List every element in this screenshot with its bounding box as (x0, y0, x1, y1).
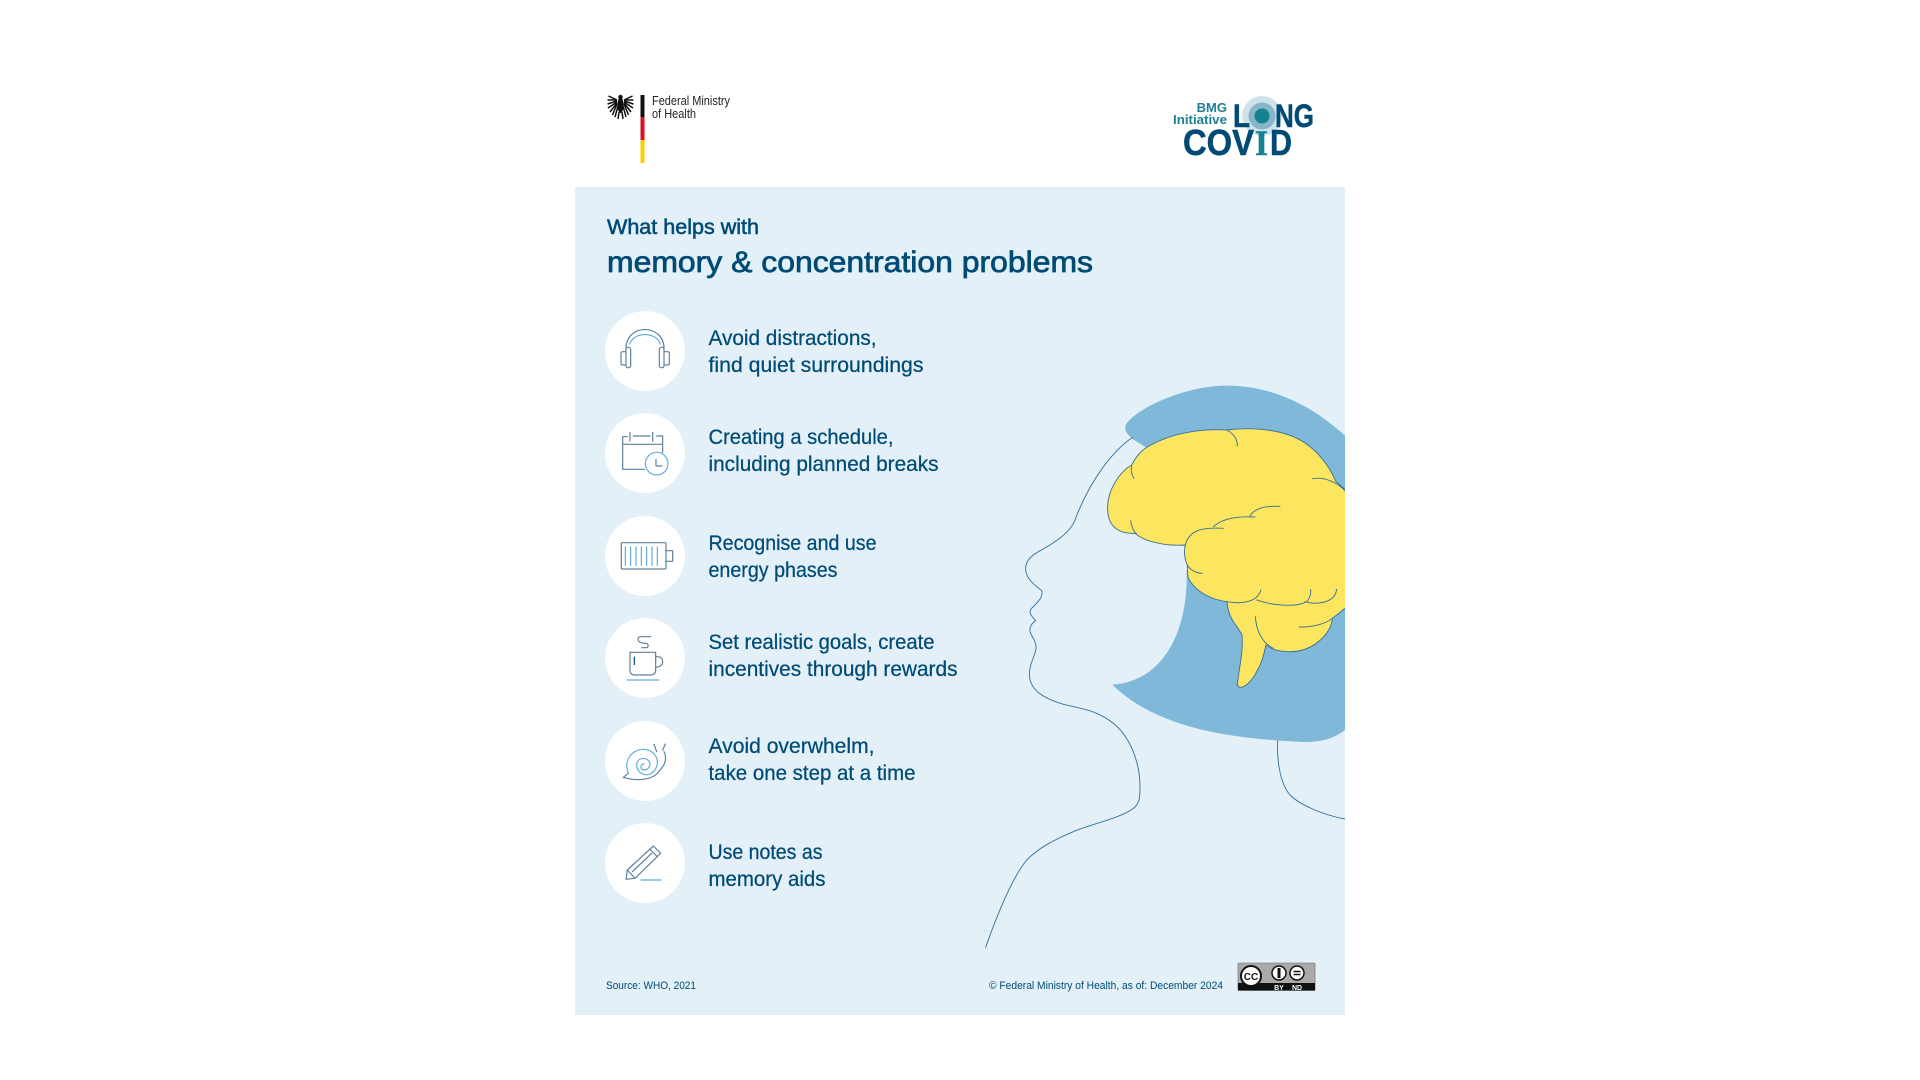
title (607, 216, 1093, 279)
item: notes (605, 823, 826, 903)
text: Set realistic goals, create (708, 631, 934, 654)
brain (1108, 429, 1350, 687)
ministry name: Federal Ministry (652, 93, 730, 108)
Long Covid initiative logo (1173, 96, 1314, 163)
copyright note: © Federal Ministry of Health, as of: December 2024 (989, 980, 1223, 992)
ministry name: of Health (652, 106, 696, 121)
ministry logo (608, 93, 730, 163)
item: schedule (605, 413, 938, 493)
text: Creating a schedule, (708, 426, 894, 449)
icon: headphones (605, 311, 685, 391)
icon: creative commons badge (1238, 963, 1315, 992)
text: Recognise and use (708, 532, 876, 555)
text (708, 631, 958, 681)
item: avoid overwhelm (605, 721, 916, 801)
brain folds (1131, 430, 1345, 648)
source note: Source: WHO, 2021 (606, 980, 696, 992)
back of neck outline (1277, 741, 1345, 819)
initiative label (1173, 100, 1227, 127)
logo target halo (1242, 96, 1282, 136)
title: What helps with (607, 216, 759, 239)
hair back (1112, 570, 1345, 742)
icon: creative commons badge: CC (1244, 972, 1258, 983)
text: incentives through rewards (708, 658, 958, 681)
title: memory & concentration problems (607, 246, 1093, 279)
initiative label: BMG (1197, 100, 1227, 115)
illustration: head with brain (986, 386, 1350, 947)
icon: creative commons badge: BY (1274, 985, 1284, 992)
text (708, 735, 916, 785)
text (708, 841, 826, 891)
COVID wordmark: D (1270, 122, 1292, 163)
COVID wordmark: COV (1183, 122, 1254, 163)
text (708, 532, 876, 582)
item: avoid distractions (605, 311, 924, 391)
text: take one step at a time (708, 762, 916, 785)
item: energy phases (605, 516, 876, 596)
text: energy phases (708, 559, 838, 582)
text: Avoid overwhelm, (708, 735, 874, 758)
hair top (1125, 386, 1345, 489)
text (708, 426, 938, 476)
panel: background (575, 187, 1345, 1015)
icon: german flag bar (640, 95, 644, 163)
icon: coffee cup (605, 618, 685, 698)
ministry name (652, 93, 730, 121)
icon: snail (605, 721, 685, 801)
LONG wordmark: L (1233, 98, 1250, 134)
text (708, 327, 924, 377)
icon: calendar with clock (605, 413, 685, 493)
text: find quiet surroundings (708, 354, 924, 377)
LONG wordmark: NG (1275, 98, 1314, 134)
text: Avoid distractions, (708, 327, 876, 350)
face and neck outline (986, 437, 1140, 947)
initiative label: Initiative (1173, 112, 1227, 127)
LONG wordmark (1233, 98, 1314, 134)
infographic canvas (575, 94, 1345, 1015)
icon: pencil (605, 823, 685, 903)
icon: creative commons badge: ND (1292, 985, 1302, 992)
text: memory aids (708, 868, 826, 891)
icon: federal eagle (608, 95, 634, 119)
COVID wordmark: I (1255, 123, 1268, 163)
text: including planned breaks (708, 453, 938, 476)
text: Use notes as (708, 841, 822, 864)
icon: battery (605, 516, 685, 596)
item: realistic goals (605, 618, 958, 698)
